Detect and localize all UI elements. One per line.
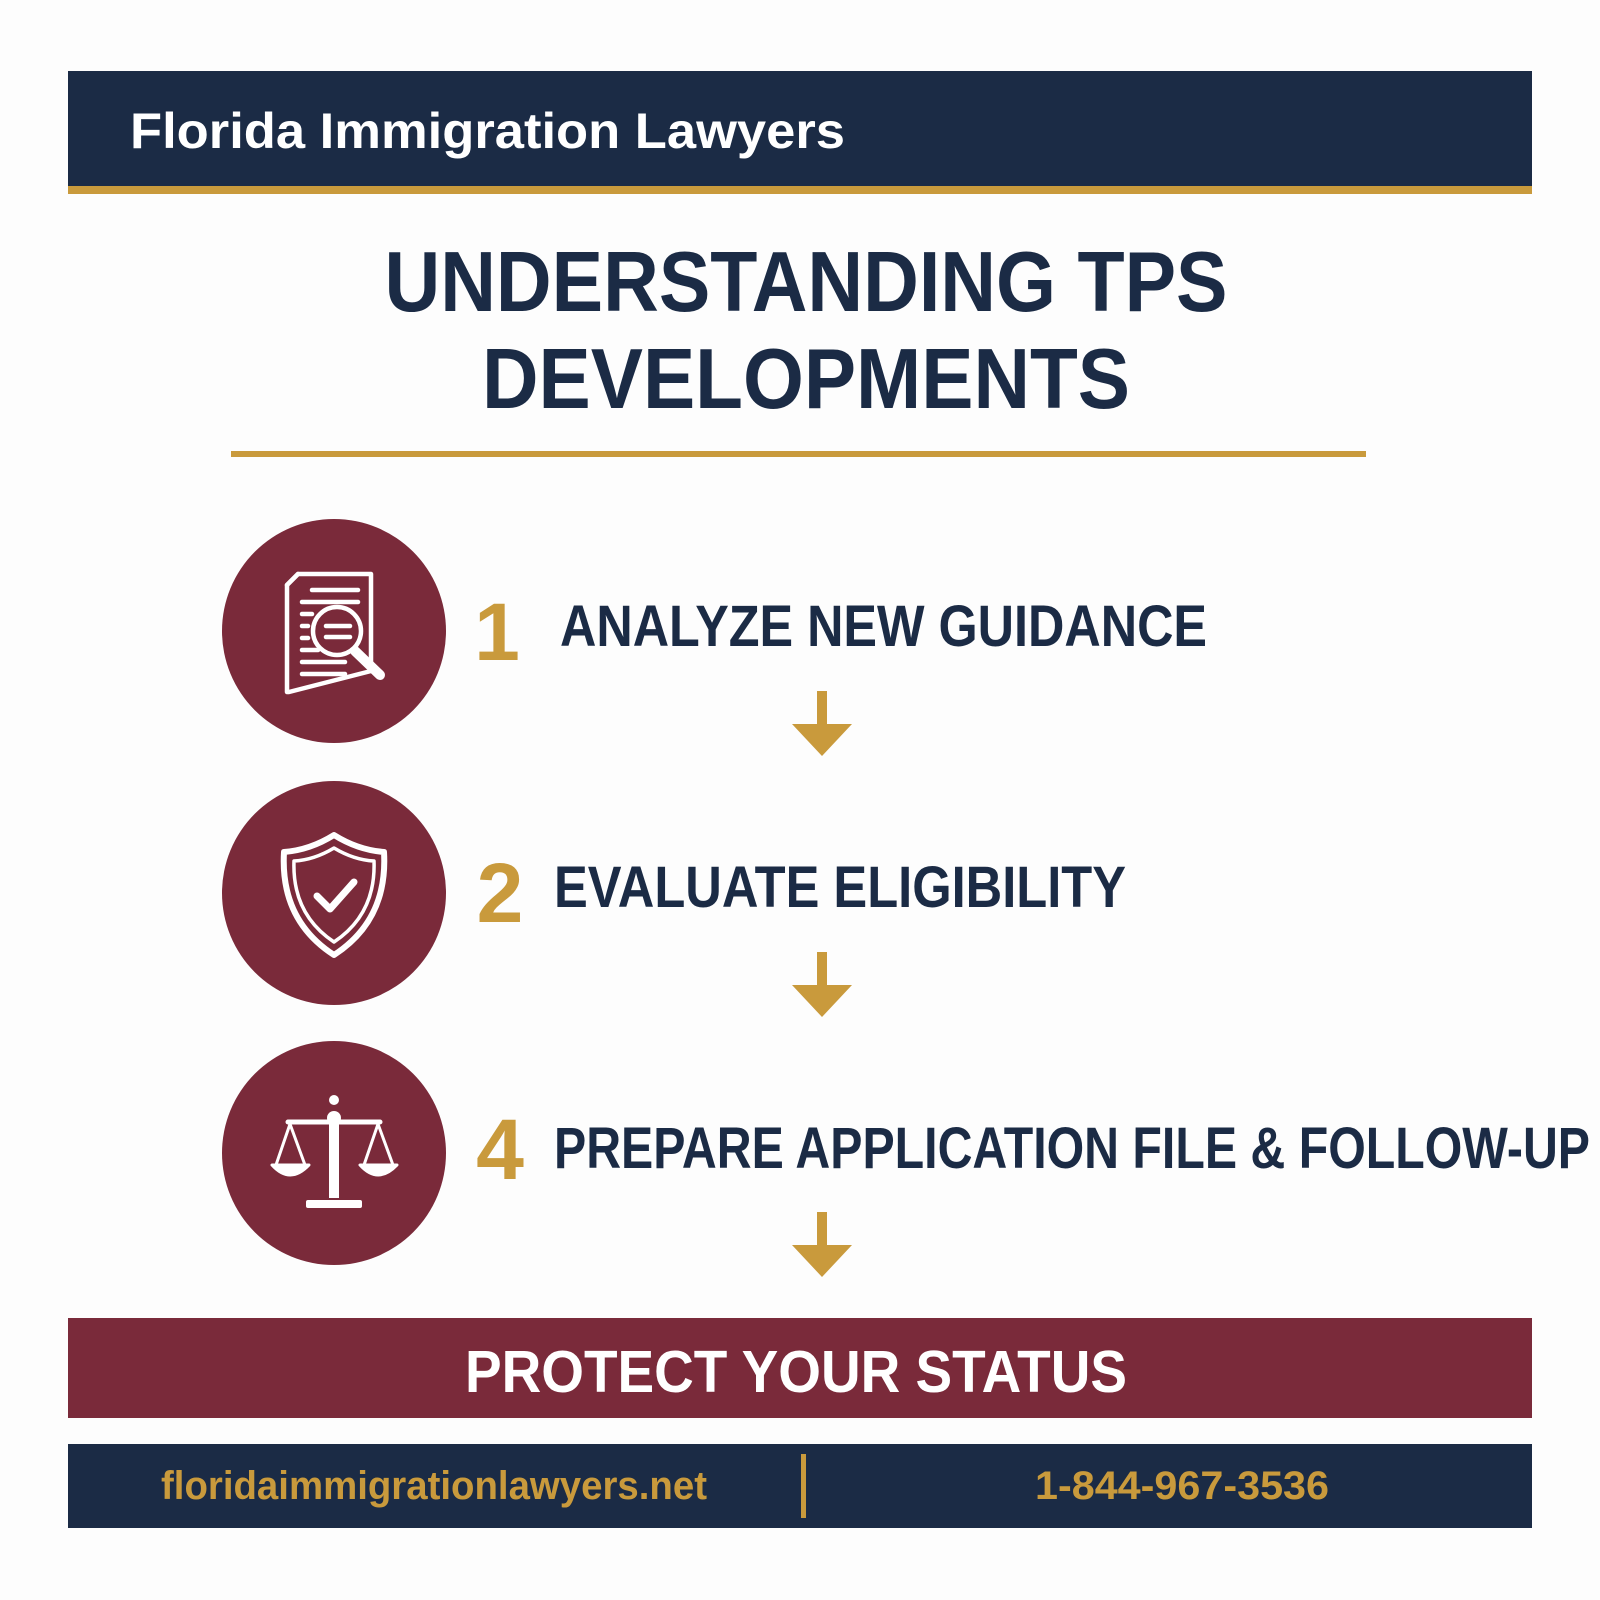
title — [384, 235, 1228, 427]
step 1 label: ANALYZE NEW GUIDANCE — [560, 594, 1207, 659]
footer phone: 1-844-967-3536 — [1035, 1464, 1329, 1508]
footer website: floridaimmigrationlawyers.net — [161, 1464, 707, 1508]
header bar — [68, 71, 1532, 194]
arrow 1 — [792, 691, 852, 756]
number 2: 2 — [477, 846, 523, 940]
title: UNDERSTANDING TPS — [384, 235, 1228, 330]
icon: scales of justice — [222, 1041, 446, 1265]
banner: protect your status: PROTECT YOUR STATUS — [465, 1339, 1127, 1405]
arrow 2 — [792, 952, 852, 1017]
arrow 3 — [792, 1212, 852, 1277]
step 3 — [222, 1041, 1590, 1265]
title: DEVELOPMENTS — [482, 332, 1130, 427]
title divider — [231, 451, 1366, 457]
icon: shield check — [222, 781, 446, 1005]
number 1: 1 — [474, 587, 520, 678]
icon: document with magnifier — [222, 519, 446, 743]
number 4: 4 — [476, 1102, 524, 1198]
footer bar — [68, 1444, 1532, 1528]
step 2 label: EVALUATE ELIGIBILITY — [554, 855, 1126, 920]
step 1 — [222, 519, 1207, 743]
banner: protect your status — [68, 1318, 1532, 1418]
step 2 — [222, 781, 1126, 1005]
header text: Florida Immigration Lawyers — [130, 103, 845, 159]
